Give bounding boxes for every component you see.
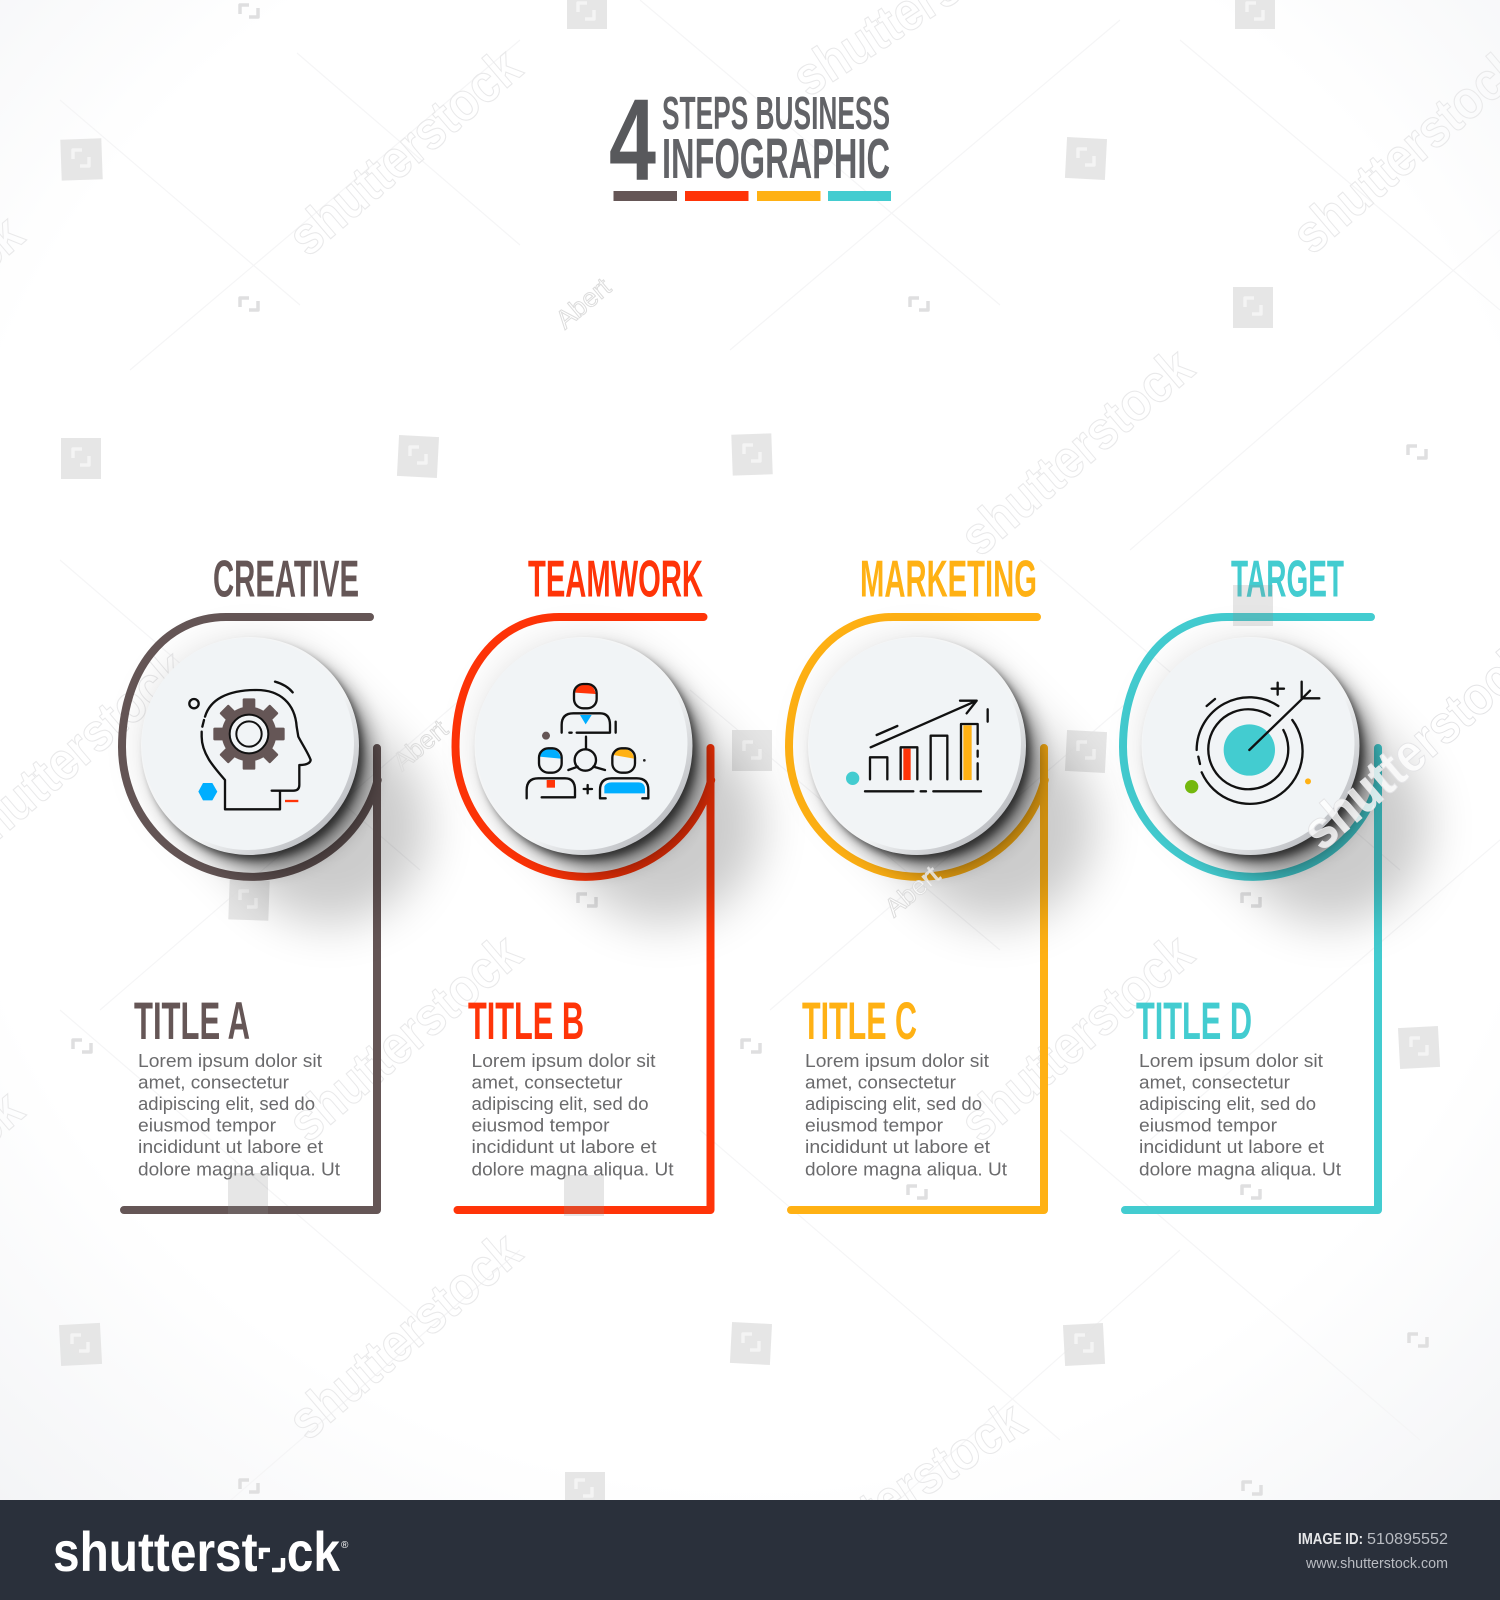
connector frame xyxy=(1123,617,1379,1210)
disk xyxy=(1142,637,1360,855)
body text: eiusmod tempor xyxy=(138,1116,276,1136)
body text: eiusmod tempor xyxy=(805,1116,943,1136)
panel: step 1 creative xyxy=(122,550,378,1210)
icon: head with gear xyxy=(189,682,311,809)
heading: marketing: MARKETING xyxy=(860,550,1037,608)
body text: adipiscing elit, sed do xyxy=(805,1094,982,1114)
body text: amet, consectetur xyxy=(805,1072,956,1092)
body text: Lorem ipsum dolor sit xyxy=(805,1051,989,1071)
watermark layer: shutterstock xyxy=(277,1220,533,1451)
header title xyxy=(609,75,891,205)
disk shadow xyxy=(147,644,370,866)
body text: eiusmod tempor xyxy=(1139,1116,1277,1136)
footer logo: shutterstock xyxy=(53,1520,341,1583)
colour legend bars xyxy=(614,191,891,201)
heading: teamwork: TEAMWORK xyxy=(528,550,703,608)
connector frame xyxy=(122,617,378,1210)
watermark layer: shutterstock xyxy=(277,922,533,1153)
foreground watermarks: Abert xyxy=(879,859,946,923)
connector frame xyxy=(456,617,711,1210)
foreground watermarks: Abert xyxy=(387,713,454,777)
body text: dolore magna aliqua. Ut xyxy=(1139,1160,1341,1180)
body text: incididunt ut labore et xyxy=(805,1137,990,1157)
body text: Lorem ipsum dolor sit xyxy=(472,1051,656,1071)
disk shadow xyxy=(480,644,704,866)
watermark layer: shutterstock xyxy=(949,336,1205,567)
footer bar xyxy=(0,1500,1500,1600)
body text: amet, consectetur xyxy=(472,1072,622,1092)
watermark layer: shutterstock xyxy=(277,36,533,267)
heading line: infographic: INFOGRAPHIC xyxy=(662,127,890,191)
body text: incididunt ut labore et xyxy=(138,1137,323,1157)
numeral 4: 4 xyxy=(609,75,656,205)
watermark layer: shutterstock xyxy=(949,922,1205,1153)
body text: adipiscing elit, sed do xyxy=(472,1094,648,1114)
image id: IMAGE ID: xyxy=(1298,1531,1363,1548)
connector frame xyxy=(789,617,1045,1210)
body text: dolore magna aliqua. Ut xyxy=(138,1160,340,1180)
body text: dolore magna aliqua. Ut xyxy=(472,1160,674,1180)
body text: adipiscing elit, sed do xyxy=(1139,1094,1316,1114)
panel: step 3 marketing xyxy=(789,550,1045,1210)
disk shadow xyxy=(814,644,1037,866)
body text: eiusmod tempor xyxy=(472,1116,610,1136)
heading: target: TARGET xyxy=(1231,550,1344,608)
body text: incididunt ut labore et xyxy=(1139,1137,1324,1157)
watermark layer: Abert xyxy=(550,271,617,335)
body text: amet, consectetur xyxy=(138,1072,289,1092)
title b: TITLE B xyxy=(468,992,584,1051)
panel: step 2 teamwork xyxy=(456,550,711,1210)
foreground watermarks xyxy=(228,585,1500,1216)
title d: TITLE D xyxy=(1136,992,1252,1051)
disk xyxy=(474,637,692,855)
title c: TITLE C xyxy=(802,992,917,1051)
body text: Lorem ipsum dolor sit xyxy=(1139,1051,1323,1071)
heading: creative: CREATIVE xyxy=(213,550,359,608)
heading line: steps business: STEPS BUSINESS xyxy=(662,87,890,139)
website url: www.shutterstock.com xyxy=(1305,1555,1448,1572)
body text: Lorem ipsum dolor sit xyxy=(138,1051,322,1071)
footer logo: ® xyxy=(341,1540,349,1551)
disk xyxy=(141,637,359,855)
icon: rising bar chart xyxy=(846,701,988,791)
icon: team xyxy=(527,684,648,798)
body text: adipiscing elit, sed do xyxy=(138,1094,315,1114)
title a: TITLE A xyxy=(134,992,250,1051)
disk shadow xyxy=(1148,644,1370,866)
disk xyxy=(808,637,1026,855)
icon: target with arrow xyxy=(1185,682,1319,804)
panel: step 4 target xyxy=(1123,550,1379,1210)
image id: 510895552 xyxy=(1367,1531,1448,1548)
watermark layer: shutterstock xyxy=(764,1389,1036,1595)
body text: incididunt ut labore et xyxy=(472,1137,656,1157)
body text: amet, consectetur xyxy=(1139,1072,1290,1092)
body text: dolore magna aliqua. Ut xyxy=(805,1160,1007,1180)
